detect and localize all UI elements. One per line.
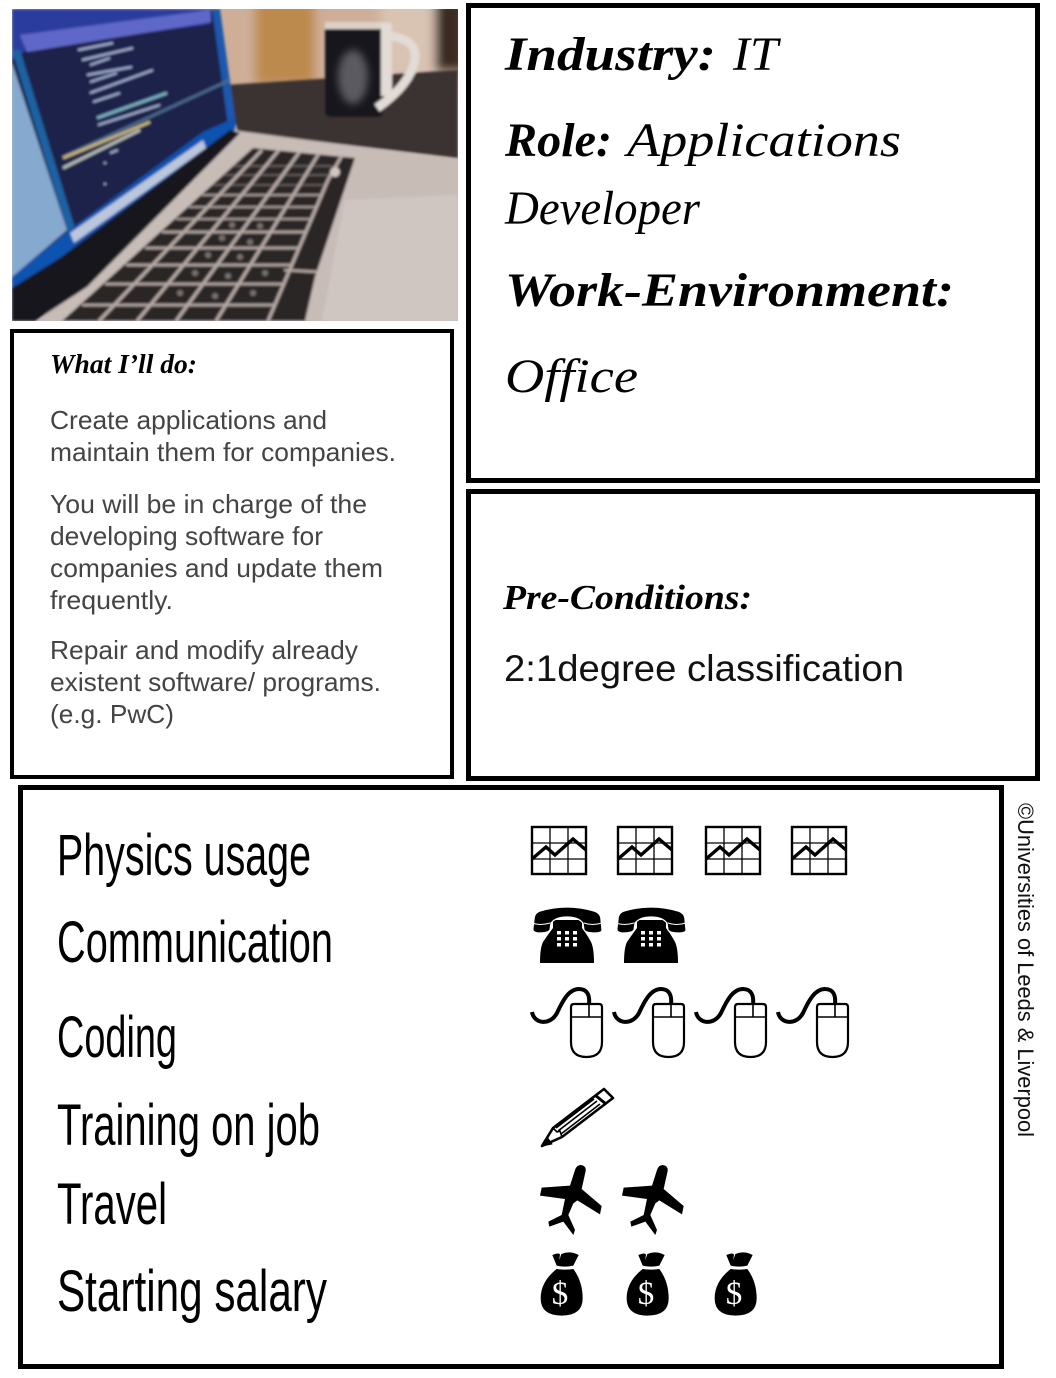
panel: role summary [468, 6, 1038, 480]
icons: charts [532, 827, 846, 874]
text block: duties: existent software/ programs. [50, 667, 381, 697]
row: training on job: Training on job [57, 1093, 320, 1158]
text: degree requirement: 2:1degree classification [504, 648, 904, 689]
text block: duties: You will be in charge of the [50, 489, 367, 519]
text: work environment [505, 264, 954, 403]
text block: duties [50, 405, 396, 729]
row: travel: Travel [57, 1172, 167, 1237]
text block: duties: developing software for [50, 521, 323, 551]
text block: duties: Create applications and [50, 405, 327, 435]
heading: pre-conditions: Pre-Conditions: [502, 578, 752, 617]
row: travel [57, 1165, 684, 1237]
icons: telephones [532, 907, 686, 963]
text: role [504, 114, 901, 235]
text: industry: Industry: [504, 28, 716, 81]
row: coding: Coding [57, 1005, 177, 1070]
text: work environment: Work-Environment: [505, 264, 954, 317]
text block: duties: frequently. [50, 585, 173, 615]
icons: money bags: $ [552, 1276, 568, 1312]
icons: airplanes [540, 1165, 684, 1235]
text block: duties: (e.g. PwC) [50, 699, 174, 729]
row: communication [57, 907, 686, 975]
panel: what I'll do [12, 331, 452, 777]
text: industry [504, 28, 781, 81]
text: role: Developer [504, 182, 700, 235]
photo: laptop on desk with mug [12, 0, 465, 330]
copyright note: ©Universities of Leeds & Liverpool [1013, 803, 1038, 1137]
row: physics usage: Physics usage [57, 823, 311, 888]
text: role: Role: [504, 114, 612, 167]
panel: skills ratings [20, 788, 1002, 1366]
row: coding [57, 989, 848, 1070]
text block: duties: Repair and modify already [50, 635, 358, 665]
icons: money bags [541, 1252, 757, 1316]
icons: money bags: $ [638, 1276, 654, 1312]
text block: duties: companies and update them [50, 553, 383, 583]
icons: money bags: $ [726, 1276, 742, 1312]
text: work environment: Office [505, 350, 638, 403]
heading: what I'll do: What I’ll do: [50, 349, 197, 379]
row: physics usage [57, 823, 846, 888]
icons: computer mice [532, 989, 848, 1057]
row: communication: Communication [57, 910, 333, 975]
icon: pencil [542, 1089, 613, 1146]
text block: duties: maintain them for companies. [50, 437, 396, 467]
row: training on job [57, 1089, 613, 1158]
panel: pre-conditions [468, 492, 1038, 778]
row: starting salary [57, 1252, 757, 1324]
text: role: Applications [624, 114, 901, 167]
text: industry: IT [732, 28, 781, 81]
row: starting salary: Starting salary [57, 1259, 327, 1324]
